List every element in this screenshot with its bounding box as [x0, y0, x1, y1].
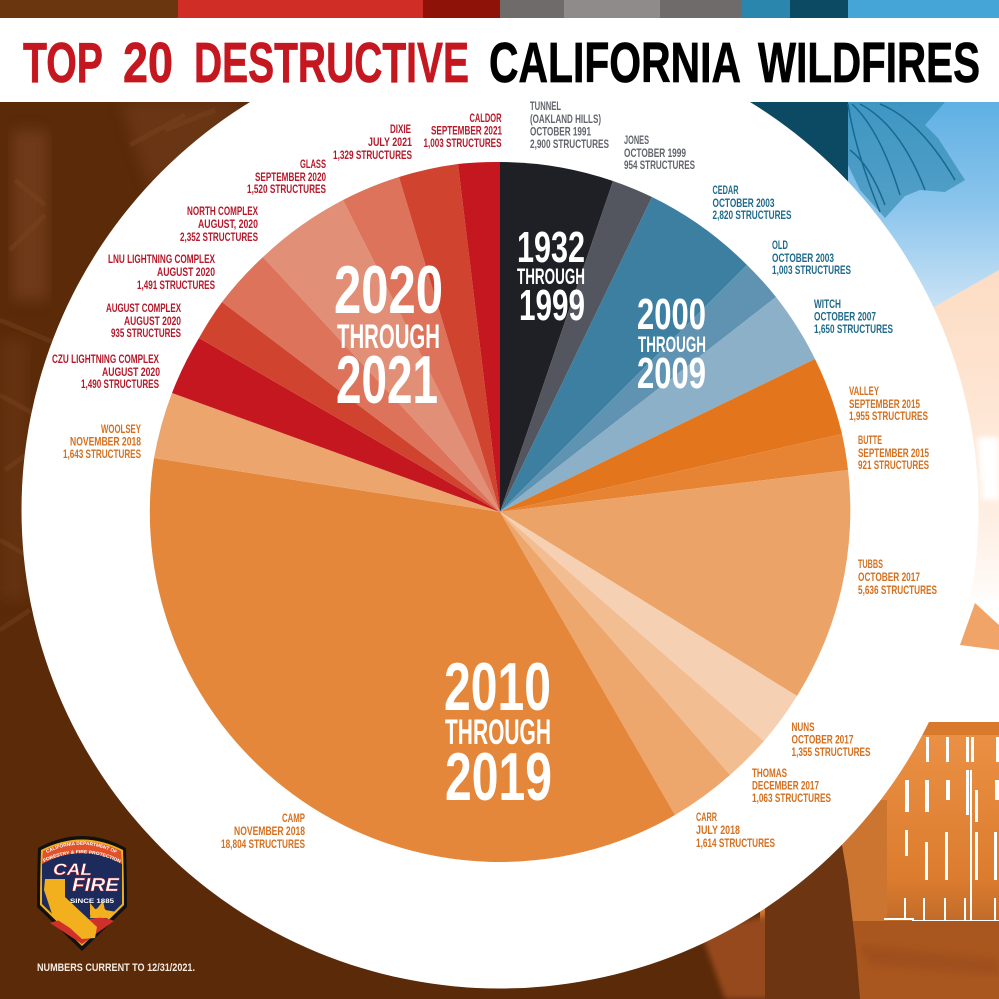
slice: North Complex — [263, 200, 500, 512]
label: Old: OCTOBER 2003 — [772, 252, 834, 265]
label: August Complex: AUGUST COMPLEX — [106, 302, 181, 315]
label: LNU Lightning Complex: AUGUST 2020 — [157, 266, 215, 279]
label: CZU Lightning Complex: AUGUST 2020 — [102, 366, 160, 379]
period label: 2000 through 2009: THROUGH — [638, 332, 706, 357]
label: Carr: JULY 2018 — [696, 824, 740, 837]
label: August Complex: 935 STRUCTURES — [111, 327, 181, 340]
label: Tunnel: OCTOBER 1991 — [530, 126, 591, 138]
label: Cedar: CEDAR — [712, 184, 739, 197]
title: red part: TOP — [23, 31, 103, 94]
slice: Woolsey — [154, 393, 500, 512]
label: Dixie — [333, 123, 412, 162]
label: LNU Lightning Complex — [108, 253, 215, 292]
slice: CZU Lightning Complex — [172, 338, 500, 512]
label: Nuns — [792, 721, 871, 759]
period label: 2010 through 2019 — [444, 649, 552, 815]
label: Thomas: THOMAS — [752, 767, 787, 780]
icon: CAL FIRE shield logo: SINCE 1885 — [70, 898, 114, 905]
label: LNU Lightning Complex: 1,491 STRUCTURES — [137, 279, 215, 292]
slice: August Complex — [199, 302, 500, 512]
label: Woolsey: NOVEMBER 2018 — [70, 436, 141, 448]
label: Caldor: SEPTEMBER 2021 — [431, 124, 502, 138]
title band — [0, 18, 999, 102]
period label: 2000 through 2009 — [637, 290, 706, 398]
label: North Complex — [180, 205, 258, 244]
label: Tunnel: TUNNEL — [530, 100, 561, 113]
label: Dixie: DIXIE — [390, 123, 411, 136]
label: Glass — [247, 158, 326, 196]
label: North Complex: AUGUST, 2020 — [198, 218, 258, 231]
label: Nuns: NUNS — [792, 721, 815, 734]
icon: CAL FIRE shield logo — [37, 836, 127, 951]
period label: 2010 through 2019: THROUGH — [445, 713, 551, 752]
label: Nuns: OCTOBER 2017 — [792, 734, 854, 746]
label: Witch: 1,650 STRUCTURES — [814, 323, 893, 336]
label: Cedar — [712, 184, 792, 222]
label: Valley — [849, 385, 928, 423]
slice: Valley — [500, 359, 842, 512]
label: Camp: NOVEMBER 2018 — [234, 825, 305, 838]
icon: CAL FIRE shield logo: CALIFORNIA DEPARTMENT OF — [46, 842, 118, 853]
label: Tunnel — [530, 100, 609, 151]
slice: Thomas — [500, 512, 764, 775]
label: Witch — [814, 298, 893, 336]
title: black part: CALIFORNIA — [489, 31, 741, 94]
label: CZU Lightning Complex: 1,490 STRUCTURES — [81, 378, 159, 391]
label: Glass: 1,520 STRUCTURES — [247, 183, 326, 196]
label: Carr: 1,614 STRUCTURES — [696, 837, 775, 850]
label: Tunnel: (OAKLAND HILLS) — [530, 113, 601, 126]
label: Glass: SEPTEMBER 2020 — [255, 171, 326, 184]
slice: Nuns — [500, 512, 797, 741]
label: Witch: OCTOBER 2007 — [814, 310, 876, 324]
period label: 1932 through 1999: 1932 — [517, 223, 585, 272]
label: Camp: 18,804 STRUCTURES — [221, 838, 305, 851]
slice: Tunnel — [500, 162, 613, 512]
label: Dixie: JULY 2021 — [368, 136, 412, 149]
label: Camp — [221, 812, 305, 851]
label: Tunnel: 2,900 STRUCTURES — [530, 138, 609, 151]
label: Dixie: 1,329 STRUCTURES — [333, 149, 412, 162]
label: Caldor: CALDOR — [470, 112, 502, 125]
label: Tubbs — [858, 558, 937, 597]
period label: 2020 through 2021: 2020 — [334, 252, 443, 328]
label: Thomas: DECEMBER 2017 — [752, 780, 819, 792]
slice: Tubbs — [500, 470, 850, 696]
title: red part: DESTRUCTIVE — [194, 31, 469, 94]
label: Witch: WITCH — [814, 298, 841, 311]
period label: 1932 through 1999: 1999 — [519, 281, 585, 330]
period label: 2020 through 2021: THROUGH — [337, 318, 440, 356]
period label: 2020 through 2021 — [334, 252, 443, 418]
label: Tubbs: 5,636 STRUCTURES — [858, 584, 937, 597]
label: CZU Lightning Complex: CZU LIGHTNING COMPLEX — [52, 353, 159, 366]
label: August Complex: AUGUST 2020 — [124, 315, 181, 328]
slice: Butte — [500, 434, 848, 512]
label: Camp: CAMP — [282, 812, 305, 825]
title: red part — [23, 31, 469, 94]
label: Butte: BUTTE — [858, 434, 882, 447]
label: Thomas: 1,063 STRUCTURES — [752, 792, 831, 805]
period label: 2010 through 2019: 2019 — [445, 739, 552, 815]
label: Tubbs: OCTOBER 2017 — [858, 571, 920, 584]
label: Old: 1,003 STRUCTURES — [772, 264, 851, 277]
label: Butte: SEPTEMBER 2015 — [858, 447, 929, 460]
slice: Carr — [500, 512, 730, 815]
label: Woolsey: 1,643 STRUCTURES — [63, 448, 141, 461]
label: Woolsey — [63, 423, 141, 461]
slice: Camp — [150, 458, 675, 862]
label: Valley: 1,955 STRUCTURES — [849, 410, 928, 423]
label: Thomas — [752, 767, 831, 805]
icon: CAL FIRE shield logo: FORESTRY & FIRE PROTECTION — [42, 850, 121, 863]
slice: Cedar — [500, 197, 747, 512]
label: August Complex — [106, 302, 181, 340]
slice: Jones — [500, 181, 652, 512]
label: Caldor: 1,003 STRUCTURES — [424, 137, 502, 150]
slice: LNU Lightning Complex — [222, 257, 500, 512]
label: Old: OLD — [772, 239, 788, 252]
period label: 2000 through 2009: 2009 — [637, 349, 706, 398]
label: Butte: 921 STRUCTURES — [858, 459, 929, 472]
period label: 2010 through 2019: 2010 — [444, 649, 551, 725]
slice: Old — [500, 265, 776, 512]
label: Carr: CARR — [696, 811, 717, 824]
label: Jones — [624, 134, 695, 172]
label: Woolsey: WOOLSEY — [101, 423, 141, 436]
label: Old — [772, 239, 851, 277]
label: Valley: VALLEY — [849, 385, 879, 398]
period label: 1932 through 1999: THROUGH — [517, 264, 585, 289]
label: Tubbs: TUBBS — [858, 558, 883, 571]
label: Butte — [858, 434, 929, 472]
title: red part: 20 — [123, 31, 173, 94]
label: Cedar: OCTOBER 2003 — [712, 197, 775, 210]
label: Cedar: 2,820 STRUCTURES — [712, 209, 792, 222]
label: Nuns: 1,355 STRUCTURES — [792, 746, 871, 759]
icon: CAL FIRE shield logo: CAL — [53, 860, 92, 879]
period label: 2020 through 2021: 2021 — [336, 342, 438, 418]
label: Carr — [696, 811, 775, 850]
label: CZU Lightning Complex — [52, 353, 160, 391]
label: Valley: SEPTEMBER 2015 — [849, 398, 920, 411]
period label: 2000 through 2009: 2000 — [637, 290, 706, 339]
label: Jones: JONES — [624, 134, 649, 147]
period label: 1932 through 1999 — [517, 223, 585, 330]
icon: CAL FIRE shield logo: FIRE — [72, 875, 120, 895]
footnote: NUMBERS CURRENT TO 12/31/2021. — [37, 962, 195, 974]
label: Caldor — [424, 112, 502, 150]
slice: Witch — [500, 297, 815, 512]
label: Jones: OCTOBER 1999 — [624, 147, 686, 160]
slice: Caldor — [458, 162, 500, 512]
label: North Complex: 2,352 STRUCTURES — [180, 231, 258, 244]
label: Glass: GLASS — [300, 158, 326, 171]
pie chart — [150, 162, 850, 862]
slice: Glass — [343, 177, 500, 512]
label: LNU Lightning Complex: LNU LIGHTNING COMPLEX — [108, 253, 215, 266]
slice: Dixie — [399, 164, 500, 512]
label: Jones: 954 STRUCTURES — [624, 159, 695, 172]
label: North Complex: NORTH COMPLEX — [187, 205, 258, 218]
